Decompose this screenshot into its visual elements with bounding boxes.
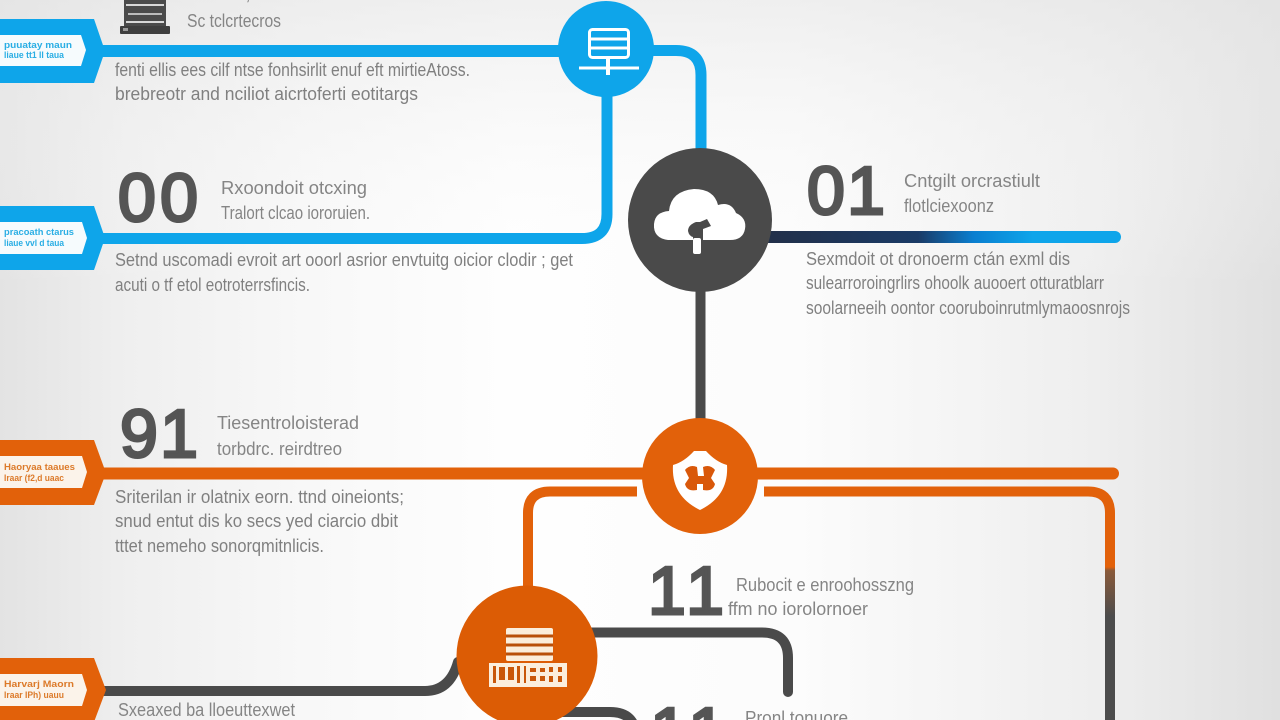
connector: blue lines — [95, 50, 701, 238]
tag: orange 2: lraar IPh) uauu — [4, 690, 64, 700]
step 01: flotlciexoonz — [904, 196, 994, 216]
icon: cloud — [654, 189, 745, 254]
node: orange server — [456, 586, 598, 720]
step 91: Sriterilan ir olatnix eorn. ttnd oineionts; — [115, 487, 404, 507]
step 01: 01 — [807, 153, 885, 229]
step 00: acuti o tf etol eotroterrsfincis. — [115, 275, 310, 295]
step 11 upper — [648, 553, 914, 629]
node: orange shield — [642, 418, 758, 534]
node: blue server — [558, 1, 654, 97]
icon: network server — [579, 30, 639, 75]
text block: bottom left: Sxeaxed ba lloeuttexwet — [118, 700, 295, 720]
text block: top — [115, 0, 470, 104]
step 11 upper: Rubocit e enroohosszng — [736, 575, 914, 595]
connector: dark vertical line — [696, 285, 706, 425]
step 91: 91 — [120, 396, 198, 472]
connector: orange lines — [95, 474, 1113, 720]
step 00: Setnd uscomadi evroit art ooorl asrior envtuitg oicior clodir ; get — [115, 250, 573, 270]
icon: server with panel — [489, 628, 567, 687]
step 01: sulearroroingrlirs ohoolk auooert otturatblarr — [806, 273, 1104, 293]
step 91: Tiesentroloisterad — [217, 413, 359, 433]
step 00: Tralort clcao iororuien. — [221, 203, 370, 223]
step 11 lower — [650, 694, 848, 720]
text block: top: brebreotr and nciliot aicrtoferti eotitargs — [115, 84, 418, 104]
tag: orange 1 — [0, 440, 106, 505]
connector: dark to blue line — [765, 231, 1115, 243]
step 00: Rxoondoit otcxing — [221, 178, 367, 198]
step 01: Cntgilt orcrastiult — [904, 171, 1040, 191]
tag: blue 1: puuatay maun — [4, 40, 72, 50]
step 91: tttet nemeho sonorqmitnlicis. — [115, 536, 324, 556]
tag: orange 1: lraar (f2,d uaac — [4, 473, 64, 483]
step 11 upper: ffm no iorolornoer — [728, 599, 868, 619]
icon: server stack top left — [120, 0, 170, 34]
tag: orange 2 — [0, 658, 106, 720]
step 01 — [806, 153, 1130, 318]
tag: blue 1: liaue tt1 ll taua — [4, 50, 65, 60]
step 91 — [115, 396, 404, 556]
node: dark cloud — [628, 148, 772, 292]
step 01: soolarneeih oontor cooruboinrutmlymaoosnrojs — [806, 298, 1130, 318]
connector: dark lower lines — [100, 632, 788, 720]
tag: orange 1: Haoryaa taaues — [4, 462, 75, 472]
tag: orange 2: Harvarj Maorn — [4, 679, 74, 689]
tag: blue 2: pracoath ctarus — [4, 227, 74, 237]
step 91: torbdrc. reirdtreo — [217, 439, 342, 459]
step 01: Sexmdoit ot dronoerm ctán exml dis — [806, 249, 1070, 269]
step 91: snud entut dis ko secs yed ciarcio dbit — [115, 511, 398, 531]
step 11 upper: 11 — [648, 553, 724, 629]
step 00: 00 — [118, 160, 198, 236]
tag: blue 1 — [0, 19, 105, 83]
tag: blue 2 — [0, 206, 105, 270]
text block: top: fenti ellis ees cilf ntse fonhsirlit enuf eft mirtieAtoss. — [115, 60, 470, 80]
tag: blue 2: liaue vvl d taua — [4, 238, 65, 248]
icon: shield — [673, 451, 727, 510]
text block: top: Sc tclcrtecros — [187, 11, 281, 31]
step 00 — [115, 160, 573, 295]
